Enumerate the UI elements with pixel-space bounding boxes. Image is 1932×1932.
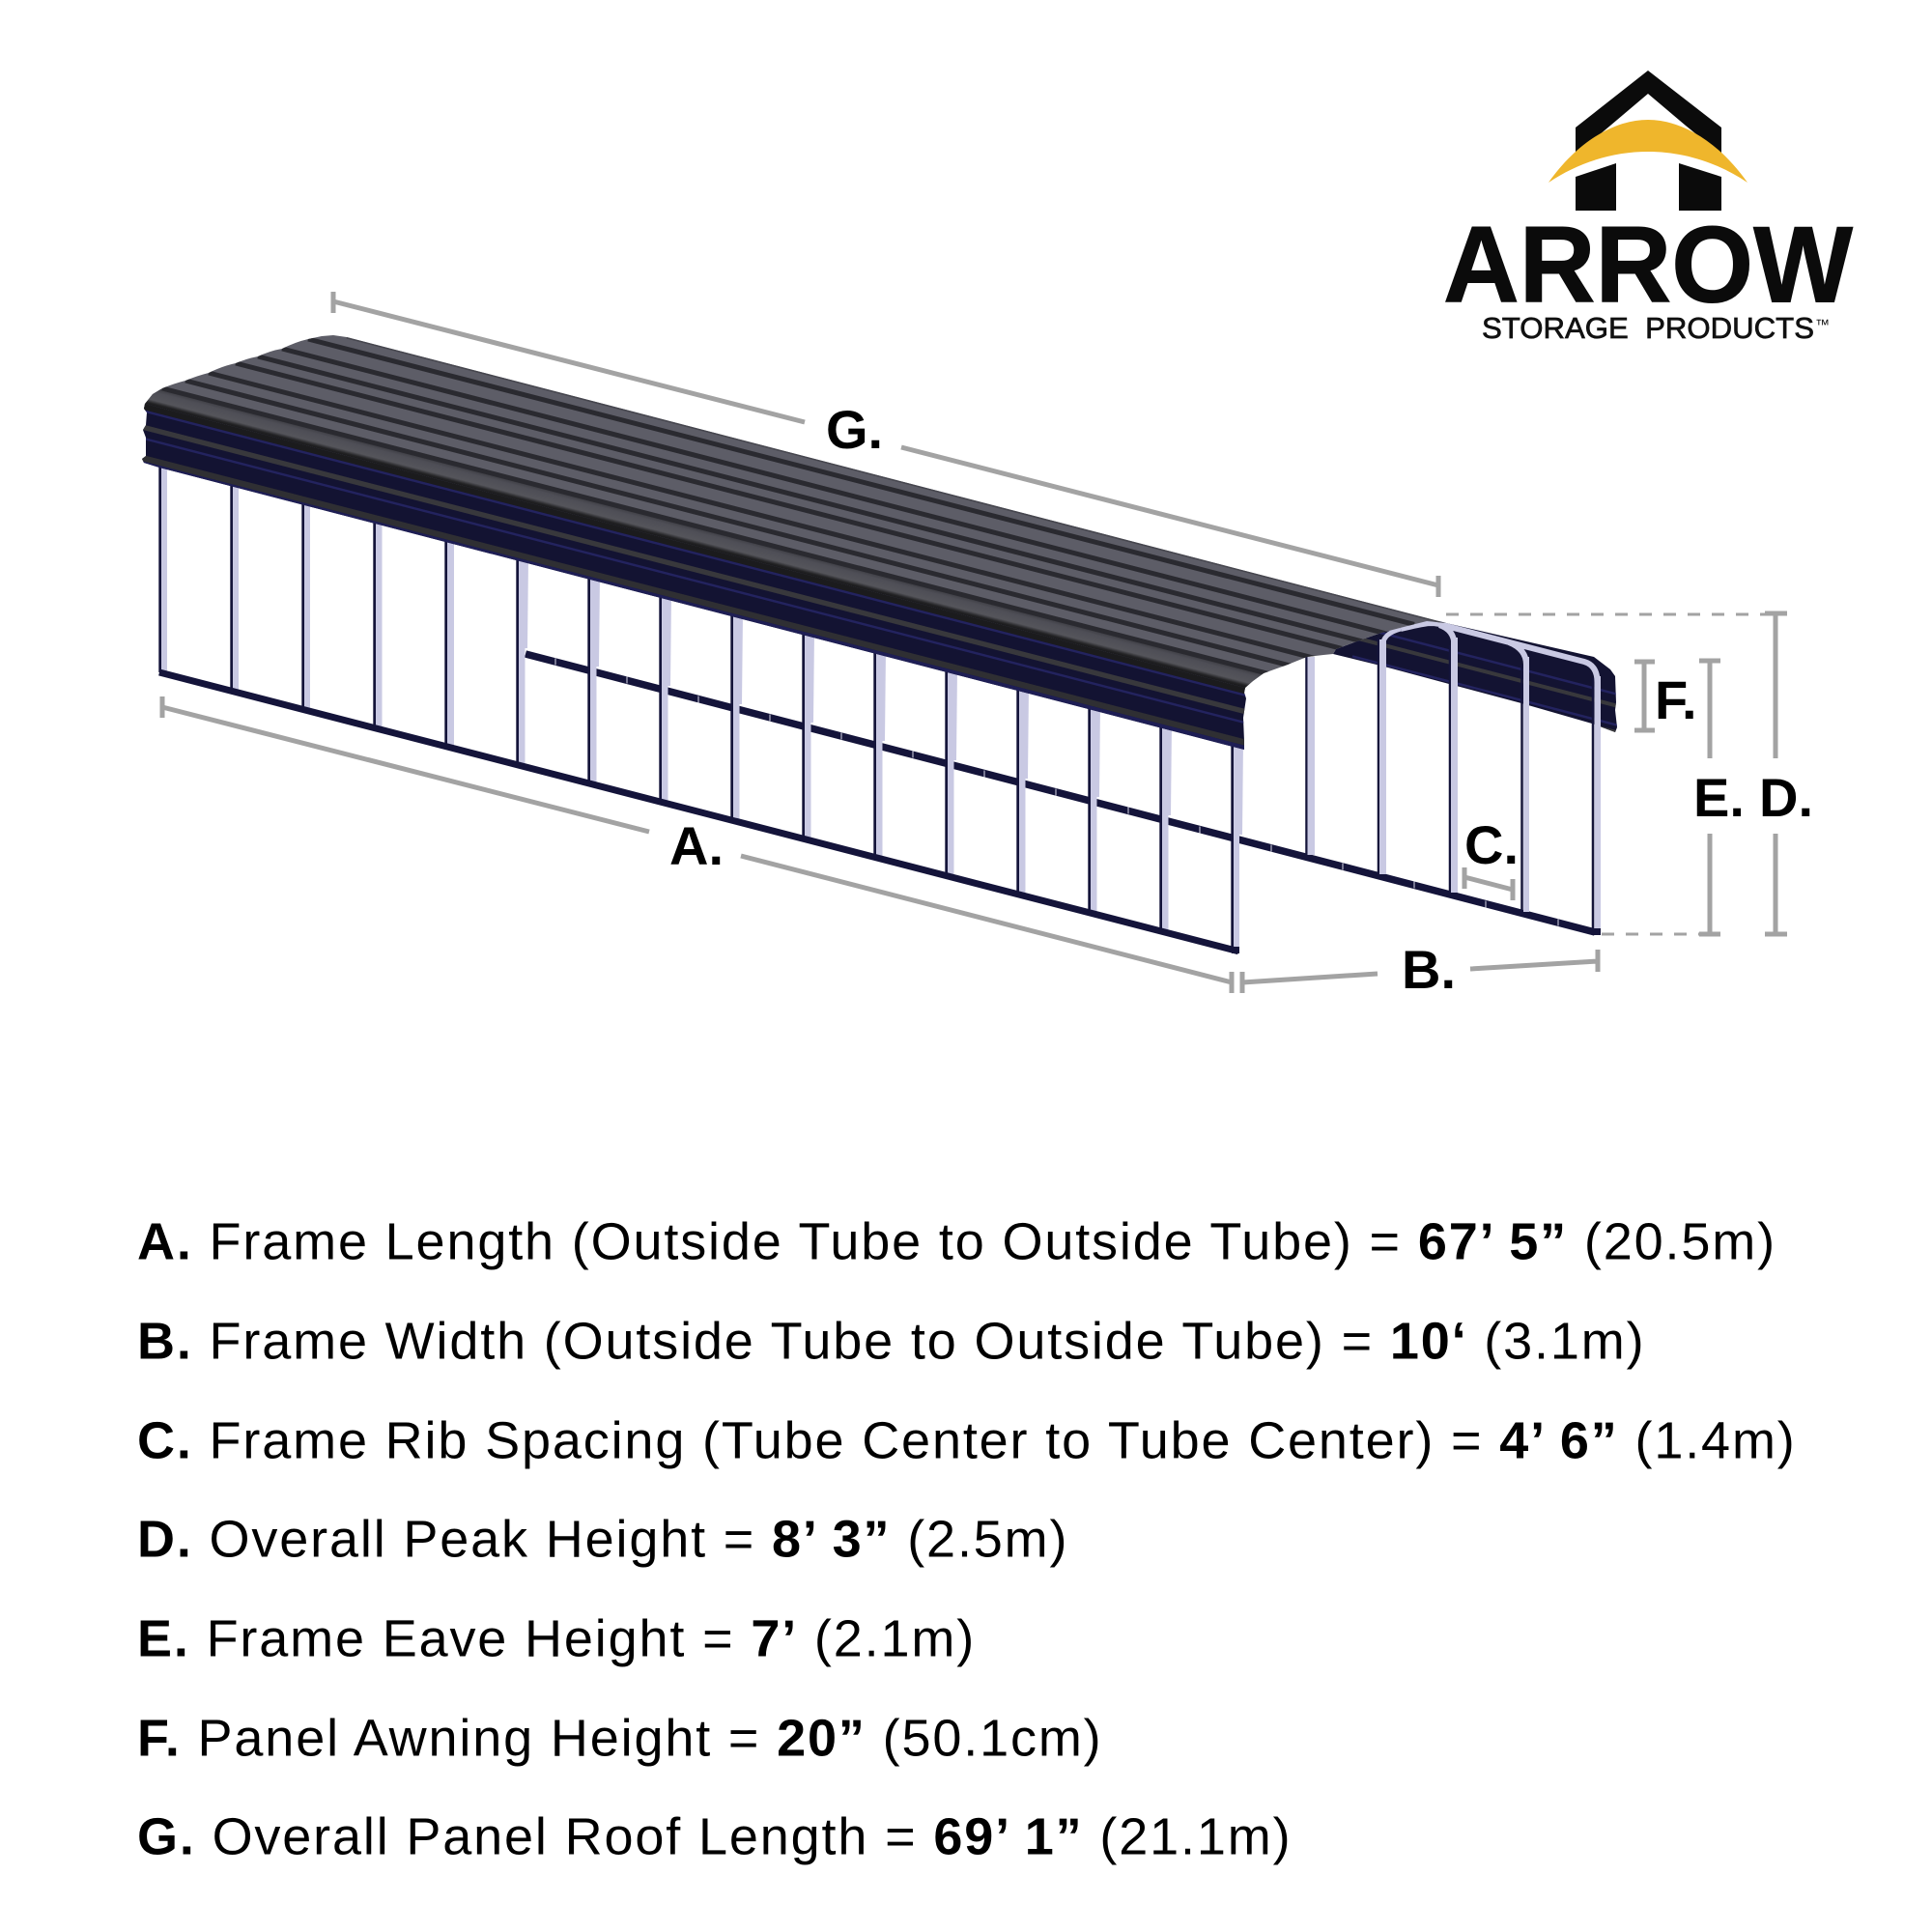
dimension labels: F. [1655, 669, 1697, 730]
logo: Arrow Storage Products [1443, 71, 1853, 345]
spec G: G. Overall Panel Roof Length = 69’ 1” (21.1m) [137, 1808, 1292, 1866]
dimension D line [1765, 613, 1787, 934]
icon: house roof [1576, 71, 1721, 155]
illustration: carport structure [135, 328, 1623, 953]
spec E: E. Frame Eave Height = 7’ (2.1m) [137, 1609, 976, 1667]
spec F: F. Panel Awning Height = 20” (50.1cm) [137, 1710, 1103, 1768]
rear frame ribs and arch [1306, 623, 1601, 935]
dimension labels: C. [1464, 814, 1519, 875]
rear eave fascia [1333, 623, 1617, 732]
spec A: A. Frame Length (Outside Tube to Outside Tube) = 67’ 5” (20.5m) [137, 1213, 1776, 1271]
dimension A line [162, 696, 1232, 993]
front eave fascia [135, 399, 1256, 754]
dimension labels [669, 399, 1813, 1000]
dimension labels: D. [1759, 767, 1813, 828]
front bottom rail [159, 672, 1239, 953]
logo wordmark: ARROW [1443, 205, 1853, 325]
corrugated roof panel [135, 328, 1459, 699]
spec D: D. Overall Peak Height = 8’ 3” (2.5m) [137, 1511, 1068, 1569]
dimension labels: A. [669, 815, 724, 876]
spec B: B. Frame Width (Outside Tube to Outside Tube) = 10‘ (3.1m) [137, 1312, 1645, 1370]
dimension G line [333, 292, 1438, 597]
front frame ribs [160, 464, 1243, 950]
dimension C line [1464, 867, 1513, 900]
dimension labels: G. [826, 399, 883, 460]
dimension B line [1242, 950, 1598, 993]
spec C: C. Frame Rib Spacing (Tube Center to Tube Center) = 4’ 6” (1.4m) [137, 1412, 1797, 1470]
dimension F line [1634, 662, 1655, 730]
dashed extension lines [1446, 614, 1765, 934]
trademark: ™ [1815, 317, 1830, 333]
dimension labels: B. [1402, 939, 1456, 1000]
dimension labels: E. [1693, 767, 1745, 828]
dimension E line [1699, 661, 1720, 934]
icon: lower walls [1576, 163, 1721, 211]
rear bottom rail [526, 654, 1595, 932]
icon: yellow arc [1548, 120, 1747, 183]
specification list [137, 1213, 1797, 1866]
logo tagline: STORAGE PRODUCTS [1482, 312, 1814, 345]
